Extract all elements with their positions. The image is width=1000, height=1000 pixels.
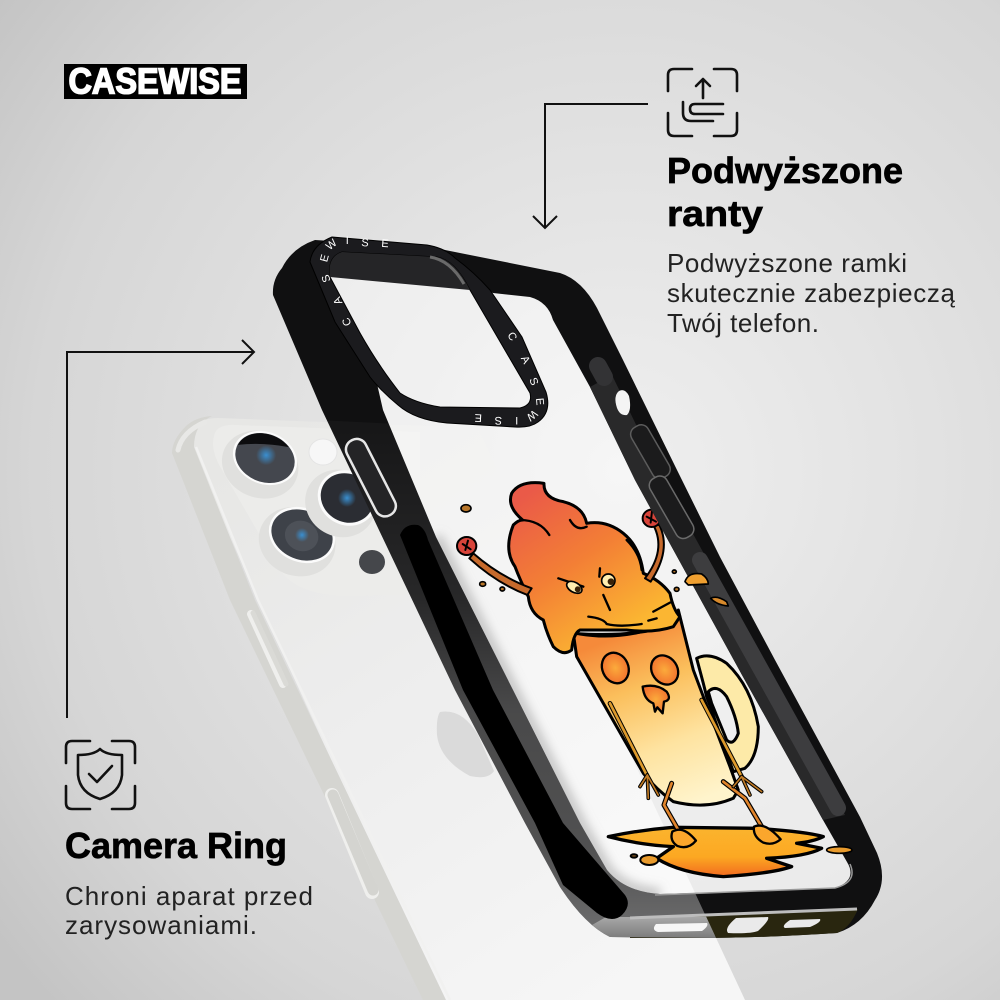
phone highlight line (196, 447, 450, 1000)
heading: Podwyższone ranty: ranty (667, 193, 763, 234)
mug skull nose (643, 686, 669, 713)
ring brand lettering: A (518, 354, 532, 367)
splash drops (461, 505, 679, 591)
heading: Podwyższone ranty (667, 150, 903, 234)
foam face lines (520, 520, 670, 626)
legs (664, 782, 762, 830)
camera lens: telephoto (248, 495, 346, 588)
arrow: to raised edges (533, 104, 648, 228)
lidar sensor (359, 550, 385, 574)
action button on frame over phone (342, 435, 399, 520)
icon: shield with check (66, 741, 135, 809)
ring brand lettering (318, 235, 546, 426)
ring brand lettering: I (346, 235, 349, 247)
logo: CASEWISE: CASEWISE (68, 60, 242, 102)
right foot (754, 826, 781, 844)
splash blob lower (711, 597, 728, 606)
text block: raised edges description (667, 248, 956, 338)
text block: camera ring description: Chroni aparat przed (65, 881, 313, 911)
ring brand lettering: A (331, 294, 345, 306)
bright rim line (630, 909, 857, 918)
volume button upper (628, 422, 673, 482)
ring brand lettering: C (340, 316, 354, 328)
text block: raised edges description: skutecznie zabezpieczą (667, 278, 956, 308)
ring brand lettering: E (318, 253, 332, 263)
right eye (602, 574, 615, 587)
text block: camera ring description: zarysowaniami. (65, 910, 257, 940)
case frame (273, 240, 882, 938)
ring brand lettering: W (324, 237, 340, 253)
mug glass (573, 610, 738, 805)
lightened area seen through the case window (323, 258, 851, 894)
heading: Podwyższone ranty: Podwyższone (667, 150, 903, 191)
phone: white iPhone back (172, 416, 745, 1000)
icon: raised edges upload (668, 69, 737, 136)
phone top corner highlight (178, 422, 205, 450)
translucent lower lip over the phone (592, 917, 720, 938)
arrow: to camera ring (67, 340, 254, 718)
ring brand lettering: S (526, 376, 540, 387)
left arm (469, 553, 532, 595)
puddle drop right (827, 847, 852, 853)
ring brand lettering: S (320, 273, 334, 284)
volume button lower (646, 473, 697, 541)
camera ring (310, 235, 548, 427)
right fist (643, 510, 661, 527)
right band dark-grey fill (590, 375, 845, 820)
camera lens: wide (293, 455, 389, 550)
left foot (671, 830, 696, 847)
black inner pill on left band (400, 525, 628, 919)
puddle drops (631, 854, 658, 865)
flash (309, 439, 337, 465)
left eye (565, 579, 584, 596)
mug belly eye left (597, 648, 634, 688)
ring brand lettering: C (505, 330, 519, 343)
right arm (645, 525, 664, 582)
translucent part of case over the phone (338, 444, 715, 937)
mug belly eye right (646, 650, 684, 690)
ring body (310, 237, 548, 427)
text block: raised edges description: Twój telefon. (667, 308, 819, 338)
heading: Camera Ring: Camera Ring (65, 825, 287, 866)
side button upper (251, 614, 283, 684)
ring brand lettering: S (494, 414, 502, 426)
bottom mic port (784, 919, 820, 928)
phone side edge (172, 416, 446, 1000)
phone case (273, 240, 882, 938)
bottom face of the case (630, 909, 858, 938)
side button lower (332, 795, 372, 892)
arms down (610, 700, 742, 777)
text block: raised edges description: Podwyższone ramki (667, 248, 907, 278)
camera bump (213, 425, 420, 596)
bottom speaker port (654, 923, 707, 932)
camera lens: main (212, 419, 309, 510)
illustration: angry beer mug character (457, 483, 823, 877)
ring brand lettering: E (474, 411, 482, 423)
mug foam rim (580, 621, 675, 636)
ring inner wall highlight (430, 257, 464, 284)
ring brand lettering: W (523, 407, 540, 423)
left fist (457, 537, 476, 555)
text block: camera ring description (65, 881, 313, 940)
bottom charging port (727, 917, 768, 933)
ring inner wall (330, 252, 470, 290)
right band top inset (598, 366, 604, 377)
phone back face (186, 418, 745, 1000)
hands (640, 775, 762, 798)
splash blobs printed over the frame (685, 574, 852, 853)
side button cut-out hole (615, 390, 630, 415)
ring brand lettering: I (515, 414, 518, 426)
mug handle (697, 656, 758, 772)
case inner gloss (655, 864, 852, 895)
ring brand lettering: S (361, 237, 369, 250)
right band grey inset (700, 560, 838, 808)
soft shadow along inner edge of case (436, 537, 660, 894)
ring brand lettering: E (381, 238, 389, 250)
splash blob upper (685, 574, 708, 585)
apple logo (437, 711, 494, 777)
puddle (608, 827, 823, 877)
foam head (509, 483, 680, 653)
ring brand lettering: E (533, 398, 546, 406)
